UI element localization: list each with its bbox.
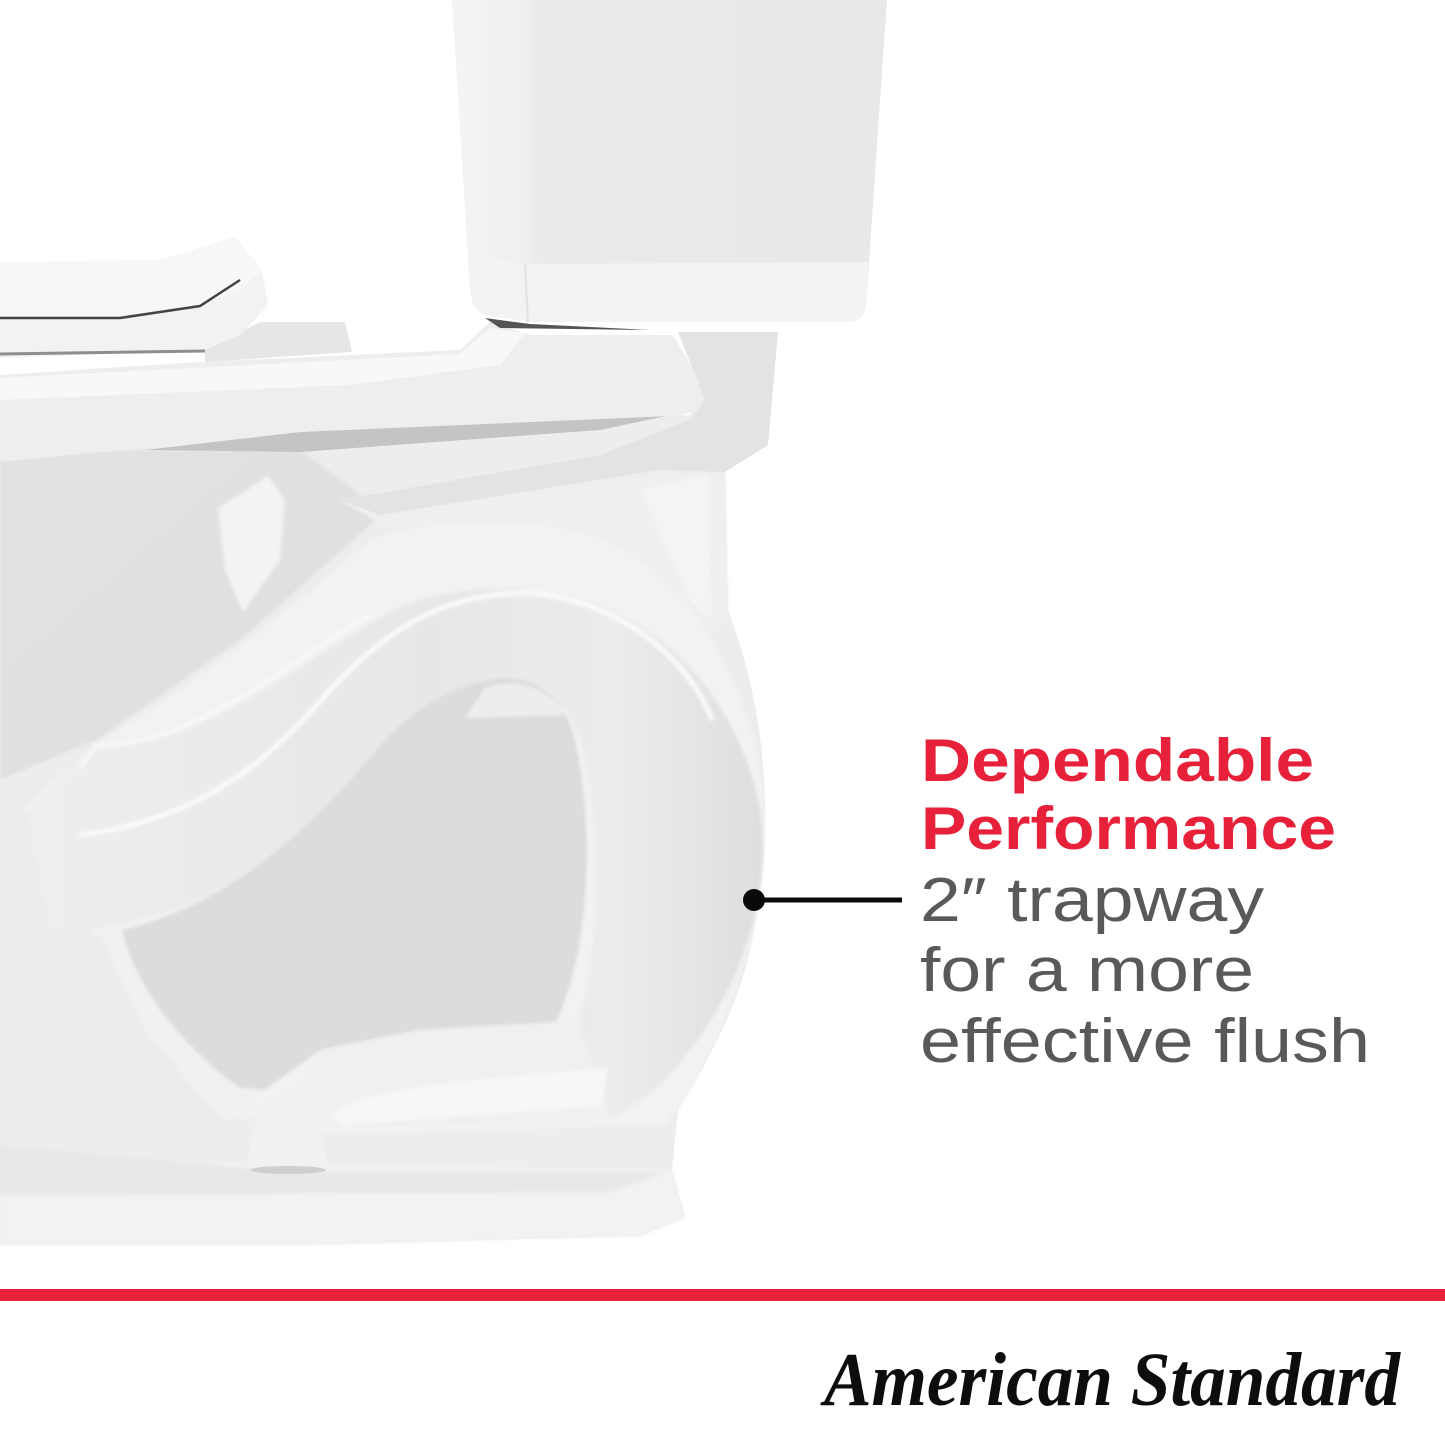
lower left return — [100, 925, 262, 1122]
bolt cap — [248, 1092, 326, 1173]
callout description: effective flush — [920, 1007, 1370, 1076]
neck — [340, 332, 778, 515]
seat lid top — [0, 237, 262, 316]
rim shadow — [145, 410, 695, 452]
seat — [0, 237, 268, 358]
trapway upper highlight — [80, 615, 370, 768]
brand logo wordmark: American Standard — [820, 1338, 1401, 1422]
red divider band — [0, 1289, 1445, 1301]
trapway tube — [28, 589, 763, 1118]
body details — [0, 450, 765, 1245]
callout heading — [921, 727, 1336, 862]
rim deck — [0, 322, 702, 462]
recessed panel — [122, 678, 587, 1090]
bowl — [0, 450, 385, 780]
bowl highlight — [218, 476, 285, 612]
toilet body silhouette — [0, 332, 778, 1245]
panel top glint — [465, 684, 566, 718]
callout description: for a more — [920, 936, 1254, 1005]
outer trapway surround — [20, 522, 765, 1135]
upper body above trapway — [340, 472, 728, 640]
left lower body — [0, 790, 225, 1145]
trapway top highlight — [80, 593, 712, 835]
toilet illustration — [0, 0, 887, 1245]
tank — [452, 0, 887, 322]
tank base band — [468, 255, 868, 322]
seat hinge — [205, 322, 352, 362]
lower right tube band — [290, 1022, 612, 1128]
callout description — [920, 866, 1370, 1076]
base plinth — [0, 1160, 685, 1245]
seat gap line — [0, 280, 240, 318]
callout heading: Performance — [921, 795, 1336, 862]
callout description: 2″ trapway — [920, 866, 1264, 935]
callout leader line with dot — [743, 889, 902, 911]
callout heading: Dependable — [921, 727, 1314, 794]
tank gasket shadow — [485, 318, 650, 330]
